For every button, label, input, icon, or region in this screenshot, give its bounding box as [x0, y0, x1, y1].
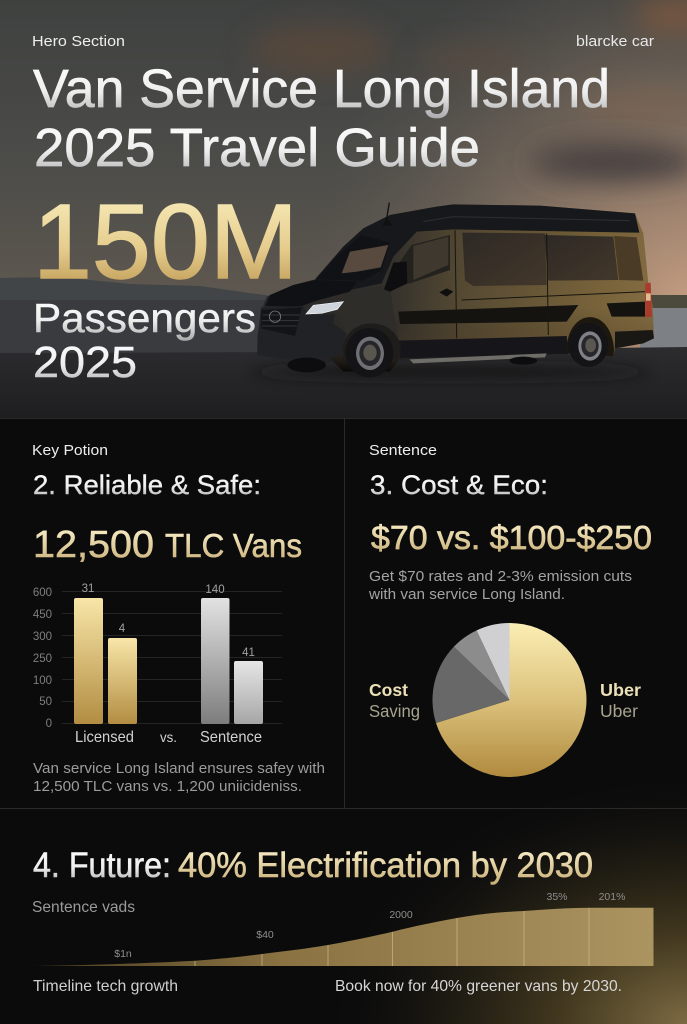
gold bars — [74, 598, 137, 724]
point labels: 2000 — [389, 909, 413, 921]
right pie label — [600, 680, 641, 721]
hero eyebrow: Hero Section — [32, 33, 125, 50]
panel: future — [32, 846, 654, 995]
y axis labels: 450 — [33, 609, 52, 621]
right horizon water — [640, 295, 687, 352]
slice: dark gray — [432, 647, 510, 723]
category labels: Licensed — [75, 729, 134, 746]
bottom corner glow — [320, 770, 687, 1024]
heading: 4. Future: — [33, 846, 171, 885]
stat number: 12,500 — [33, 524, 154, 566]
right pie label: Uber — [600, 680, 641, 700]
ground — [0, 347, 687, 418]
door seams — [455, 230, 645, 338]
right pie label: Uber — [600, 701, 638, 721]
body stripe front — [398, 305, 578, 324]
value labels: 41 — [242, 647, 255, 659]
badge — [269, 311, 281, 322]
hood — [265, 280, 357, 307]
point labels — [114, 891, 625, 960]
value labels: 4 — [119, 623, 126, 635]
door window interior — [413, 237, 448, 280]
rear wheel — [567, 317, 614, 367]
shoreline hills — [0, 277, 269, 300]
passengers label: Passengers — [33, 295, 256, 341]
side window 2 — [544, 235, 618, 281]
clouds — [250, 0, 687, 182]
left pie label — [369, 680, 420, 721]
roof sheen — [423, 217, 630, 222]
heading: 40% Electrification by 2030 — [178, 846, 593, 885]
van shadow — [250, 365, 650, 379]
y axis labels — [33, 587, 52, 730]
point labels: $1n — [114, 948, 132, 960]
value labels: 31 — [82, 583, 94, 595]
category labels — [75, 729, 262, 746]
y axis labels: 250 — [33, 653, 52, 665]
hidden front wheel — [287, 358, 326, 372]
silver bars — [201, 598, 263, 724]
windshield — [316, 235, 390, 281]
panel: hero — [0, 0, 687, 418]
y axis labels: 0 — [46, 718, 52, 730]
grid lines — [62, 592, 282, 724]
year label: 2025 — [33, 338, 137, 387]
sky background — [0, 0, 687, 360]
body text: Van service Long Island ensures safey with — [33, 760, 325, 777]
brand label: blarcke car — [576, 33, 654, 50]
point labels: 35% — [546, 891, 568, 903]
grille slats — [262, 315, 300, 326]
step bar — [409, 353, 547, 363]
van body — [257, 204, 654, 372]
title line 1: Van Service Long Island — [33, 59, 610, 119]
point labels: $40 — [256, 929, 274, 941]
side window 3 — [614, 236, 643, 281]
body text: 12,500 TLC vans vs. 1,200 uniicideniss. — [33, 778, 302, 795]
panel: reliable and safe — [32, 442, 325, 795]
headlight — [306, 302, 343, 314]
grille — [261, 307, 302, 336]
tail light — [645, 283, 652, 317]
bar chart — [33, 583, 282, 746]
door window — [400, 235, 450, 284]
y axis labels: 300 — [33, 631, 52, 643]
panel: cost and eco — [368, 442, 652, 777]
big number: 150M — [33, 183, 298, 301]
body text: Get $70 rates and 2-3% emission cuts — [369, 568, 632, 585]
stat unit: TLC Vans — [165, 527, 302, 564]
van illustration — [257, 203, 654, 377]
slice: mid gray — [454, 630, 510, 700]
windshield reflection — [342, 245, 388, 273]
front bumper and nose — [257, 306, 347, 361]
eyebrow: Key Potion — [32, 442, 108, 459]
value labels — [82, 583, 255, 659]
y axis labels: 600 — [33, 587, 52, 599]
timeline caption: Timeline tech growth — [33, 978, 178, 995]
eyebrow: Sentence — [369, 442, 437, 459]
timeline ticks — [195, 908, 589, 966]
mirror — [384, 262, 407, 292]
slice: light gray — [477, 623, 510, 700]
point labels: 201% — [599, 891, 625, 903]
body stripe rear — [607, 302, 645, 317]
category labels: vs. — [160, 729, 177, 745]
side window 1 — [462, 233, 547, 286]
chart caption: Sentence vads — [32, 899, 135, 916]
roof — [315, 204, 639, 290]
body shading — [330, 319, 654, 372]
tail light glow — [646, 293, 651, 301]
left pie label: Cost — [369, 680, 408, 700]
antenna — [383, 203, 392, 225]
rear bumper — [615, 330, 654, 348]
section dividers — [0, 418, 687, 808]
door handle — [439, 288, 453, 297]
value labels: 140 — [205, 584, 225, 596]
body text: with van service Long Island. — [368, 586, 565, 603]
stat: $70 vs. $100-$250 — [371, 519, 652, 556]
y axis labels: 50 — [39, 696, 52, 708]
area chart — [35, 891, 654, 966]
body text — [368, 568, 632, 603]
title line 2: 2025 Travel Guide — [34, 118, 480, 178]
left pie label: Saving — [369, 701, 420, 721]
body text — [33, 760, 325, 795]
heading: 3. Cost & Eco: — [370, 470, 548, 500]
call to action: Book now for 40% greener vans by 2030. — [335, 978, 622, 995]
y axis labels: 100 — [33, 675, 52, 687]
water — [0, 300, 265, 353]
sill — [397, 336, 568, 358]
sunset glow — [390, 0, 687, 348]
heading: 2. Reliable & Safe: — [33, 470, 261, 500]
area fill — [35, 908, 654, 966]
category labels: Sentence — [200, 729, 262, 746]
front fender — [396, 334, 397, 335]
stat — [33, 524, 302, 566]
hidden rear wheel — [509, 357, 537, 365]
front wheel — [343, 323, 401, 377]
slice: gold — [436, 623, 586, 777]
pie chart — [432, 623, 586, 777]
